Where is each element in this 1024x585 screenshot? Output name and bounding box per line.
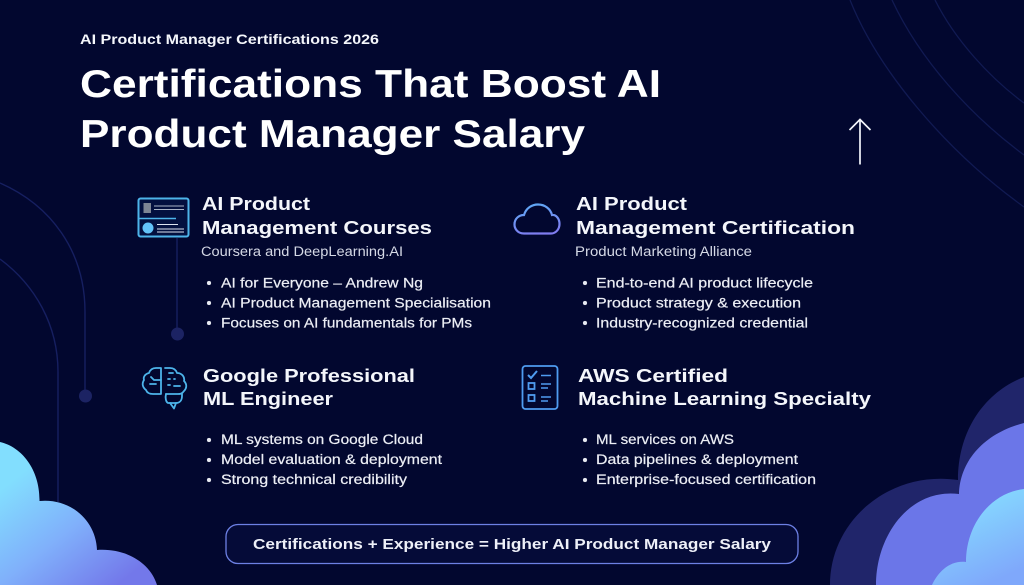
left connector lines	[0, 183, 184, 502]
bullet list: Industry-recognized credential	[596, 316, 808, 330]
bullet list: Focuses on AI fundamentals for PMs	[221, 316, 472, 330]
title: Certifications That Boost AI	[80, 63, 661, 106]
subheading: Coursera and DeepLearning.AI	[201, 244, 403, 259]
icon: cloud	[514, 204, 560, 234]
bullet list: AI Product Management Specialisation	[221, 296, 491, 310]
heading: Google Professional	[203, 365, 415, 386]
heading	[576, 193, 855, 238]
heading: AI Product	[202, 193, 310, 214]
left cloud	[0, 442, 157, 585]
bullet list	[583, 432, 816, 487]
bullet list	[583, 276, 813, 330]
callout: salary formula	[226, 524, 798, 564]
panel: AI Product Management Certification	[514, 193, 855, 330]
heading	[202, 193, 432, 238]
icon: certificate card	[138, 198, 188, 236]
bullet list: Product strategy & execution	[596, 296, 801, 310]
bullet list: End-to-end AI product lifecycle	[596, 276, 813, 290]
title: Product Manager Salary	[80, 113, 585, 156]
heading	[203, 365, 415, 409]
heading: ML Engineer	[203, 388, 333, 409]
top-right decorative arcs	[850, 0, 1024, 207]
heading	[578, 365, 872, 409]
bullet list: ML services on AWS	[596, 432, 734, 447]
icon: brain	[143, 368, 186, 408]
bullet list: Model evaluation & deployment	[221, 452, 442, 467]
heading: AI Product	[576, 193, 687, 214]
title	[80, 63, 661, 156]
bullet list	[207, 276, 491, 330]
heading: Management Certification	[576, 217, 855, 238]
icon: upward arrow	[850, 120, 870, 164]
bullet list: AI for Everyone – Andrew Ng	[221, 276, 423, 290]
heading: Machine Learning Specialty	[578, 388, 872, 409]
panel: Google Professional ML Engineer	[143, 365, 442, 487]
heading: Management Courses	[202, 217, 432, 238]
bullet list	[207, 432, 442, 487]
bullet list: Data pipelines & deployment	[596, 452, 798, 467]
panel: AWS Certified Machine Learning Specialty	[522, 365, 872, 487]
icon: checklist	[522, 366, 558, 409]
subheading: Product Marketing Alliance	[575, 244, 752, 259]
right cloud	[830, 377, 1024, 585]
callout: salary formula: Certifications + Experience = Higher AI Product Manager Salary	[253, 537, 771, 553]
bullet list: Enterprise-focused certification	[596, 472, 816, 487]
bullet list: Strong technical credibility	[221, 472, 407, 487]
bullet list: ML systems on Google Cloud	[221, 432, 423, 447]
heading: AWS Certified	[578, 365, 728, 386]
eyebrow: AI Product Manager Certifications 2026	[80, 32, 380, 47]
panel: AI Product Management Courses	[138, 193, 491, 330]
